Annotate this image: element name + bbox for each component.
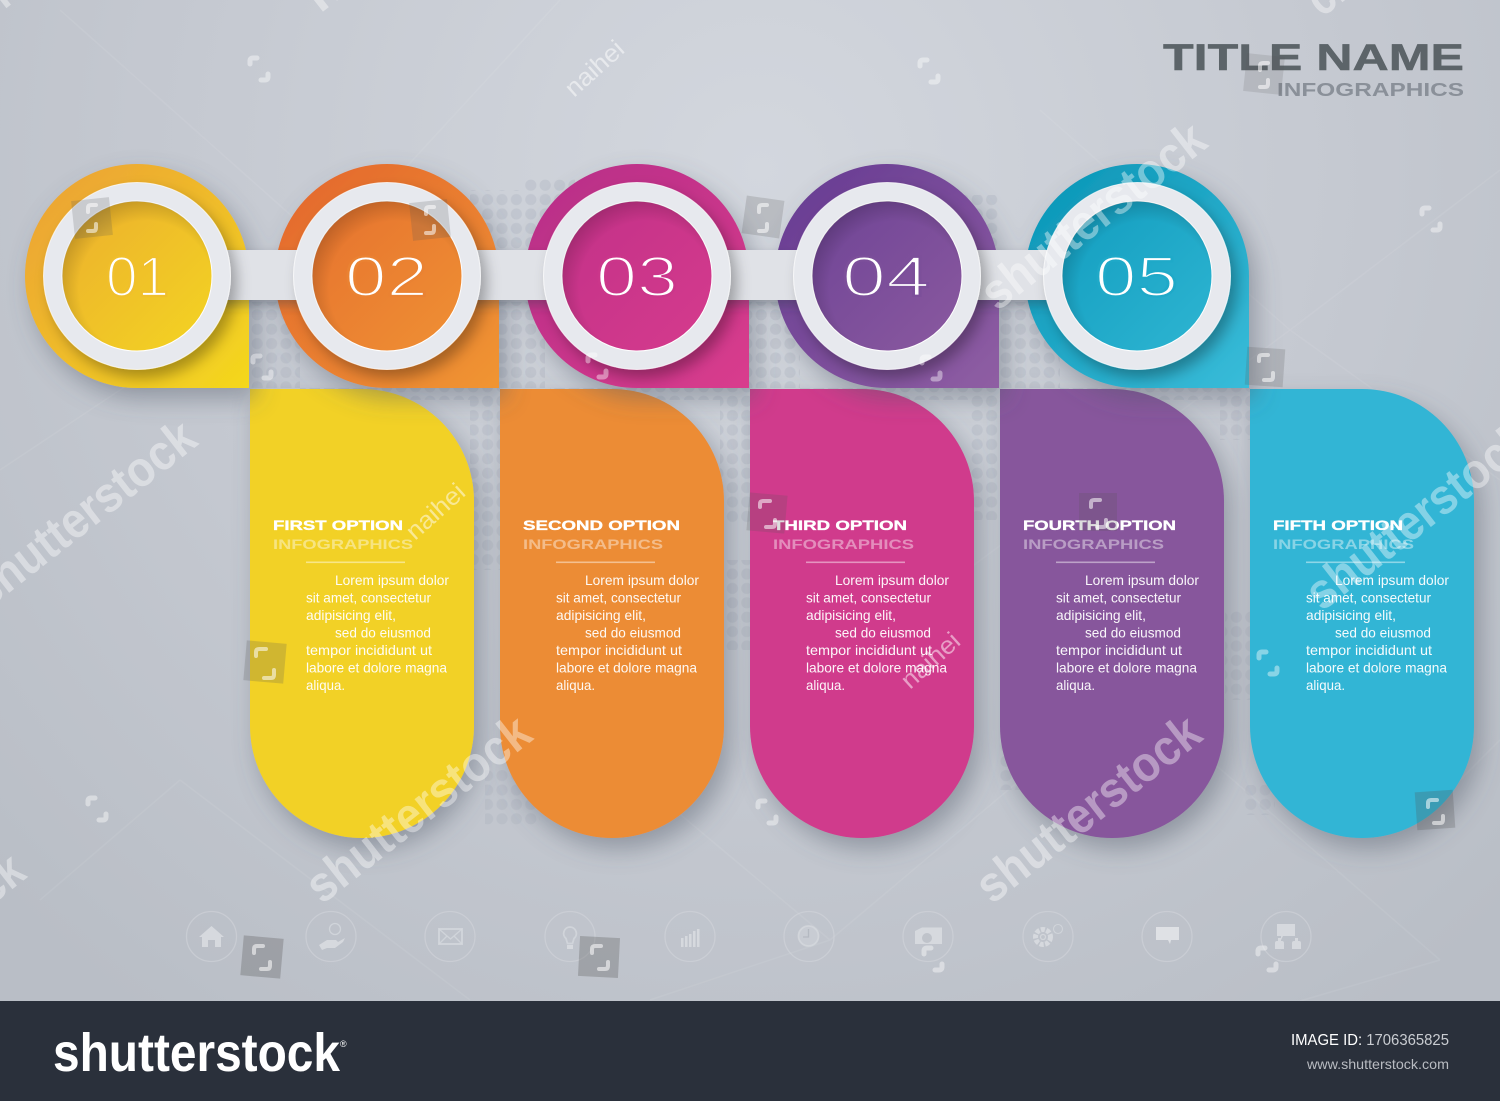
- connector bar: [137, 250, 1137, 300]
- ring 5: [1044, 182, 1230, 370]
- icon: hand with coin: [306, 912, 356, 962]
- icon: envelope: [425, 912, 475, 962]
- icon: people talking: [1261, 912, 1311, 962]
- card 3 body text: adipisicing elit,: [806, 607, 896, 623]
- card 1 body text: sit amet, consectetur: [306, 590, 431, 606]
- watermark: bracket marks on squares: [88, 63, 1443, 969]
- disc 1: [62, 201, 212, 351]
- card 1 divider: [306, 562, 405, 563]
- watermark: naihei text: [400, 35, 966, 694]
- card 5 body text: sed do eiusmod: [1335, 624, 1431, 640]
- card 2 body text: labore et dolore magna: [556, 660, 697, 676]
- card 1 heading: FIRST OPTION: [273, 517, 403, 533]
- ring 4: [794, 182, 980, 370]
- card 2 body text: adipisicing elit,: [556, 607, 646, 623]
- card 5 divider: [1306, 562, 1405, 563]
- card 3 body text: sit amet, consectetur: [806, 590, 931, 606]
- number 01: 01: [106, 245, 169, 309]
- card 2 body text: Lorem ipsum dolor: [585, 572, 699, 588]
- panel: card 2 orange: [500, 389, 724, 838]
- card 1 body text: labore et dolore magna: [306, 660, 447, 676]
- card 1 body text: Lorem ipsum dolor: [335, 572, 449, 588]
- footer bar: [0, 1001, 1500, 1101]
- icon: gears: [1023, 912, 1073, 962]
- panel: card 1 yellow: [250, 389, 474, 838]
- dotted world map: [250, 178, 1275, 825]
- step 2 badge: [294, 182, 480, 370]
- card 4 body text: sit amet, consectetur: [1056, 590, 1181, 606]
- card 2 heading: SECOND OPTION: [523, 517, 680, 533]
- card 2 shape: [500, 389, 724, 838]
- disc 3: [562, 201, 712, 351]
- panel: card 4 purple: [1000, 389, 1224, 838]
- step 5 badge: [1044, 182, 1230, 370]
- icon: clock: [784, 912, 834, 962]
- watermark: shutterstock text: shutterstock: [294, 703, 542, 914]
- card 4 body text: tempor incididunt ut: [1056, 642, 1182, 658]
- card 3 body text: labore et dolore magna: [806, 660, 947, 676]
- ring 2: [294, 182, 480, 370]
- card 5 shape: [1250, 389, 1474, 838]
- card 2 body text: sed do eiusmod: [585, 624, 681, 640]
- subtitle: INFOGRAPHICS: [1277, 80, 1464, 100]
- image id: IMAGE ID: 1706365825: [1291, 1032, 1449, 1049]
- card 3 body text: [806, 572, 949, 693]
- icon: home: [186, 912, 236, 962]
- ring 1: [44, 182, 230, 370]
- step 1 badge: [44, 182, 230, 370]
- watermark: naihei text: naihei: [895, 627, 966, 694]
- icon: bar chart: [665, 912, 715, 962]
- icon: speech bubble: [1142, 912, 1192, 962]
- card 3 body text: Lorem ipsum dolor: [835, 572, 949, 588]
- card 5 body text: [1306, 572, 1449, 693]
- card 2 divider: [556, 562, 655, 563]
- card 2 body text: tempor incididunt ut: [556, 642, 682, 658]
- registered mark: ®: [340, 1039, 347, 1049]
- disc 5: [1062, 201, 1212, 351]
- number 04: 04: [842, 245, 930, 309]
- panel: card 5 cyan: [1250, 389, 1474, 838]
- card 5 heading: FIFTH OPTION: [1273, 517, 1403, 533]
- watermark: shutterstock text: shutterstock: [969, 110, 1217, 321]
- footer logo: shutterstock: [53, 1023, 341, 1083]
- card 3 subheading: INFOGRAPHICS: [773, 536, 914, 552]
- card 5 body text: adipisicing elit,: [1306, 607, 1396, 623]
- card 3 body text: tempor incididunt ut: [806, 642, 932, 658]
- card 3 body text: sed do eiusmod: [835, 624, 931, 640]
- card 4 body text: Lorem ipsum dolor: [1085, 572, 1199, 588]
- watermark: square marks: [71, 53, 1455, 979]
- card 2 subheading: INFOGRAPHICS: [523, 536, 663, 552]
- number 02: 02: [345, 245, 428, 309]
- card 2 body text: sit amet, consectetur: [556, 590, 681, 606]
- watermark: naihei text: naihei: [559, 35, 630, 102]
- card 1 shape: [250, 389, 474, 838]
- ring 3: [544, 182, 730, 370]
- icon row: [186, 912, 1311, 962]
- teardrop backgrounds: [25, 164, 1249, 388]
- card 4 body text: aliqua.: [1056, 677, 1095, 693]
- card 4 body text: [1056, 572, 1199, 693]
- number 03: 03: [596, 245, 678, 309]
- card 4 heading: FOURTH OPTION: [1023, 517, 1176, 533]
- card 5 body text: sit amet, consectetur: [1306, 590, 1431, 606]
- step 4 badge: [794, 182, 980, 370]
- card 4 shape: [1000, 389, 1224, 838]
- number 05: 05: [1095, 245, 1178, 309]
- card 3 body text: aliqua.: [806, 677, 845, 693]
- disc 4: [812, 201, 962, 351]
- card 4 divider: [1056, 562, 1155, 563]
- card 4 subheading: INFOGRAPHICS: [1023, 536, 1164, 552]
- card 4 body text: sed do eiusmod: [1085, 624, 1181, 640]
- card 5 subheading: INFOGRAPHICS: [1273, 536, 1414, 552]
- card 5 body text: tempor incididunt ut: [1306, 642, 1432, 658]
- watermark: free bracket marks: [88, 58, 1440, 970]
- card 4 body text: labore et dolore magna: [1056, 660, 1197, 676]
- watermark: shutterstock text: shutterstock: [964, 703, 1212, 914]
- icon: light bulb: [545, 912, 595, 962]
- card 4 body text: adipisicing elit,: [1056, 607, 1146, 623]
- card 3 shape: [750, 389, 974, 838]
- card 1 subheading: INFOGRAPHICS: [273, 536, 413, 552]
- card 1 body text: [306, 572, 449, 693]
- card 5 body text: aliqua.: [1306, 677, 1345, 693]
- icon: banknote: [903, 912, 953, 962]
- panel: card 3 magenta: [750, 389, 974, 838]
- card 1 body text: sed do eiusmod: [335, 624, 431, 640]
- card 5 body text: Lorem ipsum dolor: [1335, 572, 1449, 588]
- card 1 body text: tempor incididunt ut: [306, 642, 432, 658]
- card 3 divider: [806, 562, 905, 563]
- card 1 body text: aliqua.: [306, 677, 345, 693]
- title: TITLE NAME: [1163, 37, 1464, 78]
- step 3 badge: [544, 182, 730, 370]
- card 5 body text: labore et dolore magna: [1306, 660, 1447, 676]
- disc 2: [312, 201, 462, 351]
- card 2 body text: [556, 572, 699, 693]
- watermark: naihei text: naihei: [400, 478, 471, 545]
- card 3 heading: THIRD OPTION: [773, 517, 907, 533]
- card 2 body text: aliqua.: [556, 677, 595, 693]
- website: www.shutterstock.com: [1306, 1056, 1449, 1072]
- card 1 body text: adipisicing elit,: [306, 607, 396, 623]
